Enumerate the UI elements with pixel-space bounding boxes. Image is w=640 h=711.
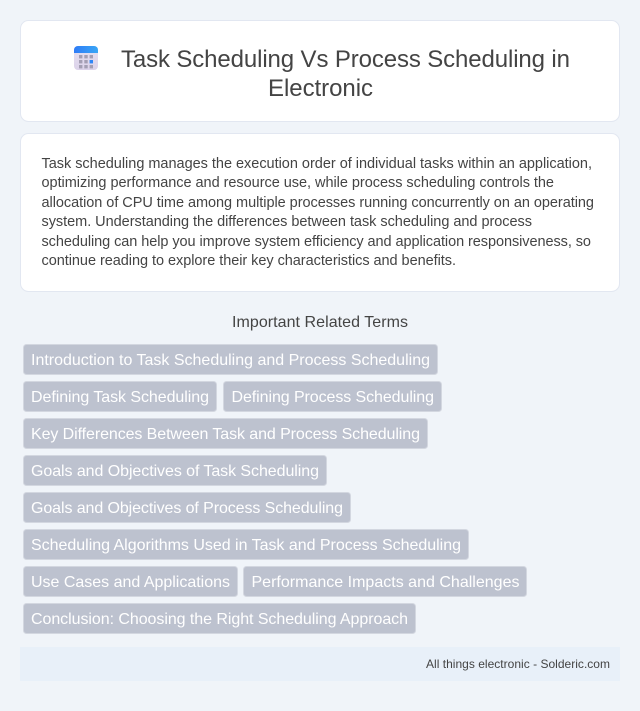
text block: introduction paragraph: Task scheduling manages the execution order of individual tasks within an application, [42,156,592,172]
tag: use cases [24,566,238,596]
tag: conclusion: Conclusion: Choosing the Right Scheduling Approach [31,611,408,628]
tag: key differences: Key Differences Between Task and Process Scheduling [31,426,420,443]
tag: goals of task scheduling: Goals and Objectives of Task Scheduling [31,463,319,480]
panel: header [20,20,620,122]
title [121,46,570,102]
panel: introduction [20,134,620,292]
text block: introduction paragraph: system. Understanding the differences between task scheduling and process [42,214,532,230]
text block: introduction paragraph [42,156,594,269]
text block: introduction paragraph: continue reading to explore their key characteristics and benefits. [42,253,456,269]
title: Electronic [268,75,373,102]
tag: defining task scheduling: Defining Task Scheduling [31,389,209,406]
tag: use cases: Use Cases and Applications [31,574,230,591]
tag list [24,344,526,634]
tag: scheduling algorithms: Scheduling Algorithms Used in Task and Process Scheduling [31,537,461,554]
text block: introduction paragraph: allocation of CPU time among multiple processes running concurrently on an operating [42,195,594,211]
tag: defining process scheduling [224,382,442,412]
text block: introduction paragraph: optimizing performance and resource use, while process scheduling controls the [42,175,554,191]
footer: All things electronic - Solderic.com [426,657,610,671]
tag: conclusion [24,604,416,634]
tag: introduction [24,344,438,374]
tag: goals of process scheduling: Goals and Objectives of Process Scheduling [31,500,343,517]
text block: introduction paragraph: scheduling can help you improve system efficiency and application responsiveness, so [42,234,591,250]
tag: goals of process scheduling [24,492,350,522]
tag: performance impacts [244,566,526,596]
heading: important related terms: Important Related Terms [232,314,408,331]
footer [20,647,620,681]
tag: goals of task scheduling [24,456,326,486]
title: Task Scheduling Vs Process Scheduling in [121,46,570,73]
tag: defining process scheduling: Defining Process Scheduling [232,389,434,406]
tag: performance impacts: Performance Impacts and Challenges [252,574,520,591]
tag: defining task scheduling [24,382,216,412]
tag: introduction: Introduction to Task Scheduling and Process Scheduling [31,352,430,369]
icon: calendar [74,46,98,70]
tag: key differences [24,418,428,448]
tag: scheduling algorithms [24,530,468,560]
